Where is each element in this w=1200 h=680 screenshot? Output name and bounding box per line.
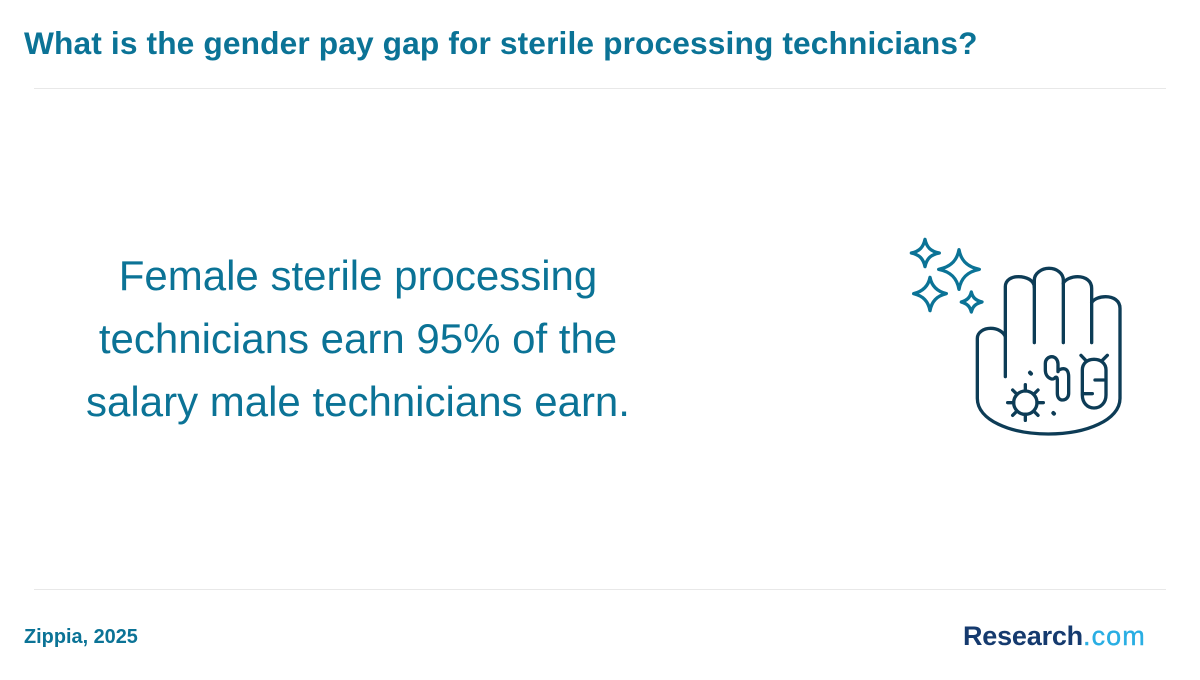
source: Zippia, 2025	[24, 626, 138, 648]
icon: germ	[1014, 391, 1037, 414]
icon: sparkles	[911, 239, 982, 312]
icon: hand	[977, 268, 1120, 434]
title: What is the gender pay gap for sterile processing technicians?	[24, 25, 978, 61]
main statement: Female sterile processing	[119, 252, 597, 299]
main statement	[86, 252, 630, 425]
logo: Research.com: Research.com	[963, 621, 1146, 651]
main statement: technicians earn 95% of the	[99, 315, 617, 362]
icon: bacteria	[1045, 357, 1069, 400]
icon: clean hand with sparkles and germs	[910, 238, 1122, 436]
main statement: salary male technicians earn.	[86, 378, 630, 425]
